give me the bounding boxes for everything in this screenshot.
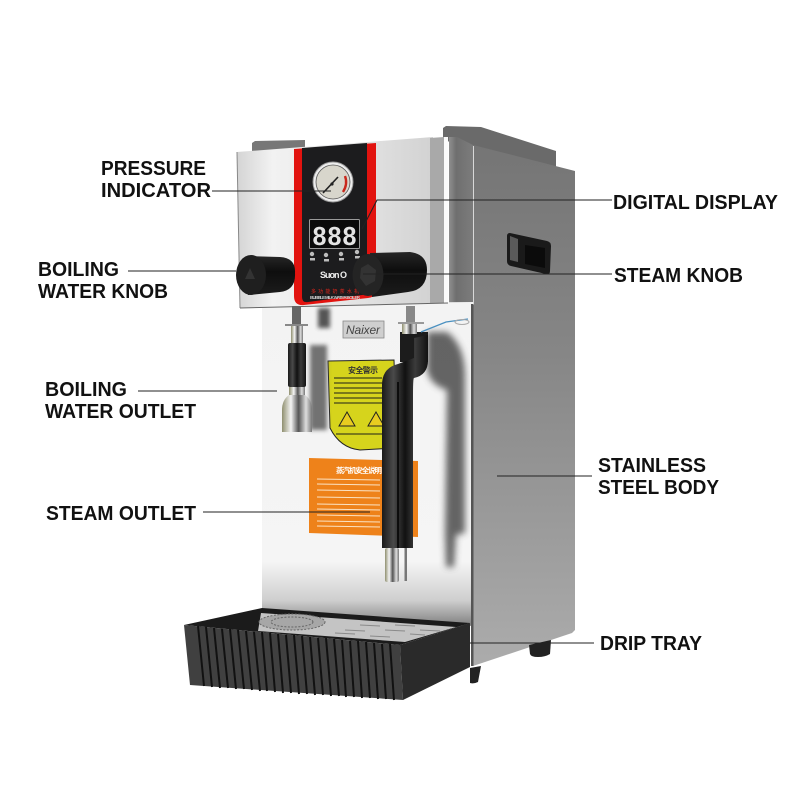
label: boiling water outlet: WATER OUTLET — [45, 400, 196, 423]
label: stainless steel body: STAINLESS — [598, 454, 706, 477]
machine illustration — [184, 126, 575, 700]
label: digital display: DIGITAL DISPLAY — [613, 191, 778, 214]
label: boiling water knob — [38, 258, 168, 303]
brand nameplate: Naixer — [346, 323, 381, 337]
label: stainless steel body — [598, 454, 719, 499]
label: boiling water outlet: BOILING — [45, 378, 127, 401]
pressure gauge — [313, 162, 353, 202]
steam knob — [352, 252, 427, 297]
black control panel — [302, 143, 367, 302]
digital display: 888 — [312, 224, 357, 254]
panel caption: 多功能奶茶水机 — [311, 288, 359, 295]
stainless steel side panel — [473, 145, 575, 666]
safety label: yellow — [328, 360, 397, 450]
side corner strip — [449, 137, 473, 305]
panel caption: BUBBLE MILK WATER BOILER — [310, 295, 361, 300]
safety label: orange: 蒸汽机安全说明 — [336, 465, 382, 475]
label: pressure indicator: INDICATOR — [101, 179, 211, 202]
label: pressure indicator: PRESSURE — [101, 157, 206, 180]
safety label: yellow: 安全警示 — [348, 365, 378, 375]
leader lines — [128, 191, 612, 643]
side panel highlight — [472, 146, 474, 305]
red control panel — [294, 143, 376, 305]
boiling water outlet — [282, 306, 330, 432]
side handle — [507, 233, 551, 274]
label: pressure indicator — [101, 157, 211, 202]
panel buttons — [310, 250, 360, 262]
label: boiling water knob: WATER KNOB — [38, 280, 168, 303]
front panel — [262, 302, 473, 626]
brand logo: Suon O — [320, 270, 347, 280]
steam outlet pipe — [382, 306, 469, 582]
brand nameplate — [343, 321, 384, 338]
steam pipe shadow — [427, 332, 465, 567]
rear lid — [252, 126, 556, 170]
label: stainless steel body: STEEL BODY — [598, 476, 719, 499]
label: boiling water knob: BOILING — [38, 258, 119, 281]
machine head — [237, 137, 448, 308]
boiling water knob — [236, 255, 295, 295]
front panel edge — [471, 304, 474, 666]
drip tray — [184, 608, 470, 700]
machine feet — [470, 640, 551, 683]
safety label: orange — [309, 458, 418, 537]
label: boiling water outlet — [45, 378, 196, 423]
panel caption — [310, 288, 361, 300]
label: drip tray: DRIP TRAY — [600, 632, 702, 655]
label: steam outlet: STEAM OUTLET — [46, 502, 196, 525]
label: steam knob: STEAM KNOB — [614, 264, 743, 287]
